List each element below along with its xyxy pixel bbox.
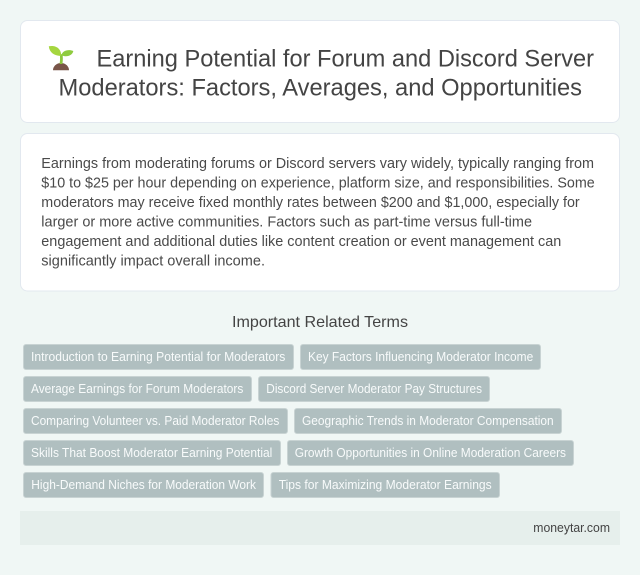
tag: Tips for Maximizing Moderator Earnings (279, 478, 492, 492)
panel: title card (20, 20, 620, 122)
tag (300, 344, 540, 370)
footer bar (20, 511, 620, 545)
tag (24, 344, 294, 370)
tag: Average Earnings for Forum Moderators (31, 382, 243, 396)
title text: Earning Potential for Forum and Discord Server (96, 46, 594, 72)
footer source text: moneytar.com (533, 520, 610, 535)
tag (24, 376, 252, 402)
summary paragraph (41, 155, 595, 270)
summary paragraph: engagement and additional duties like content creation or event management can (41, 233, 561, 250)
summary paragraph: larger or more active communities. Factors such as part-time versus full-time (41, 214, 532, 230)
tag (258, 376, 490, 402)
tag: Comparing Volunteer vs. Paid Moderator Roles (31, 414, 279, 428)
icon: seedling (49, 46, 73, 70)
tag (24, 440, 280, 466)
summary paragraph: moderators may receive fixed monthly rates between $200 and $1,000, especially for (41, 194, 580, 211)
tag (24, 408, 288, 434)
title text (58, 46, 594, 102)
tag (294, 408, 562, 434)
panel: summary card (20, 134, 620, 291)
tag: Introduction to Earning Potential for Moderators (31, 350, 285, 364)
tag: Geographic Trends in Moderator Compensation (302, 414, 554, 428)
tag (24, 472, 264, 498)
tag (271, 472, 500, 498)
tag (288, 440, 574, 466)
tag: High-Demand Niches for Moderation Work (31, 478, 257, 492)
tag: Growth Opportunities in Online Moderation Careers (295, 446, 566, 460)
summary paragraph: significantly impact overall income. (41, 252, 265, 270)
summary paragraph: $10 to $25 per hour depending on experience, platform size, and responsibilities. Some (41, 174, 595, 192)
title text: Moderators: Factors, Averages, and Opportunities (58, 74, 582, 102)
heading: important related terms: Important Related Terms (232, 314, 408, 331)
summary paragraph: Earnings from moderating forums or Discord servers vary widely, typically ranging from (41, 155, 594, 172)
tag: Key Factors Influencing Moderator Income (308, 350, 533, 364)
tag list (24, 344, 574, 498)
tag: Discord Server Moderator Pay Structures (266, 382, 482, 396)
tag: Skills That Boost Moderator Earning Potential (31, 446, 272, 460)
